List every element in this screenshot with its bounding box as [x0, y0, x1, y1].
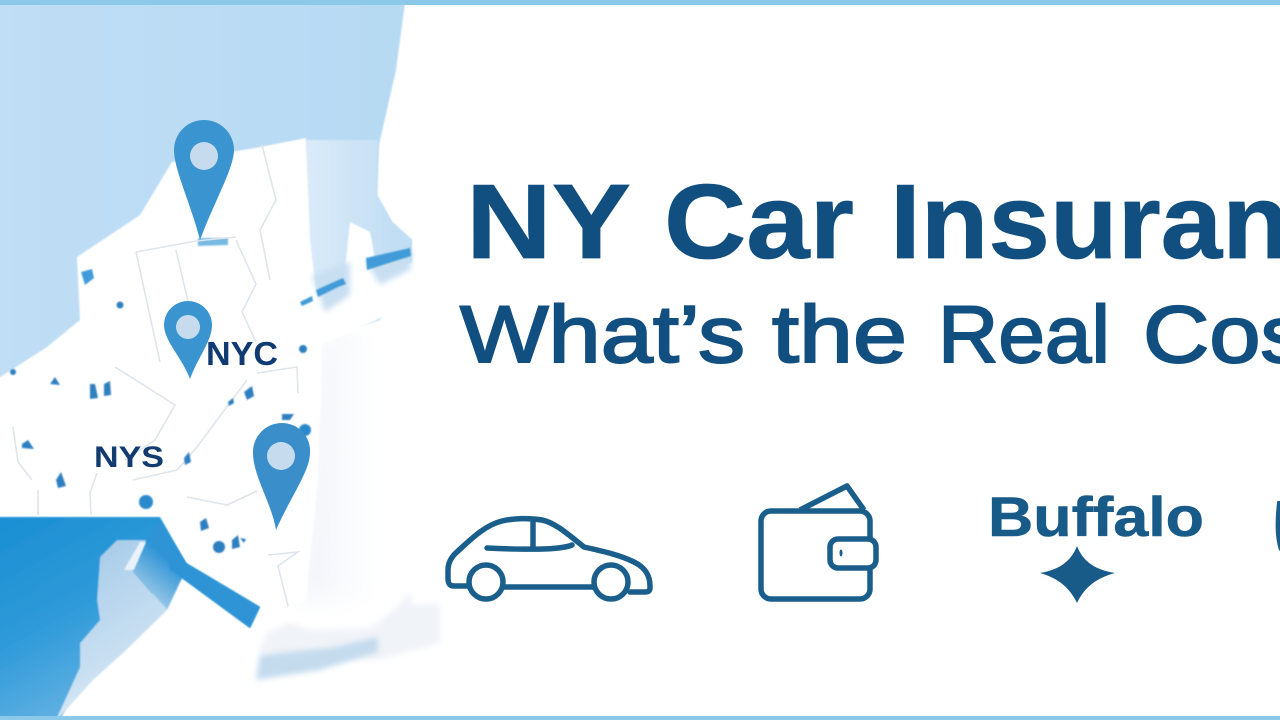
peninsula pale water	[55, 540, 167, 720]
heading: line two: Real	[938, 290, 1110, 380]
icon: wallet	[761, 486, 876, 599]
icon: four-point star	[1040, 546, 1115, 603]
heading: line two: the	[772, 290, 907, 380]
heading: line two	[460, 290, 1280, 380]
icon: top map pin	[174, 120, 234, 240]
top border	[0, 0, 1280, 5]
bay water	[0, 517, 260, 720]
county lines	[13, 145, 298, 606]
sound blue gradient	[133, 520, 186, 610]
heading: line two: What’s	[460, 290, 745, 380]
icon: lower map pin	[253, 423, 310, 530]
map: water and land	[0, 0, 440, 720]
pale shadow at right tip	[366, 250, 412, 285]
inland channel	[306, 140, 412, 320]
bottom border	[0, 716, 1280, 720]
long island strait	[160, 522, 260, 628]
pale shadow beside island tip	[312, 262, 350, 312]
label: NYC: NYC	[206, 335, 278, 372]
heading: line one: NY	[466, 163, 631, 281]
label: Buffalo: Buffalo	[988, 485, 1204, 548]
icon: middle map pin	[164, 301, 212, 379]
long island shadow	[256, 637, 378, 680]
long island	[260, 592, 440, 660]
icon: clipped shield	[1278, 503, 1280, 550]
small blue map details	[10, 302, 307, 553]
white highlight on peninsula	[124, 542, 146, 570]
icon: car	[448, 519, 650, 599]
heading: line one: Car	[664, 163, 854, 281]
north water area	[0, 0, 412, 420]
lower right shaded land	[300, 330, 372, 600]
title	[460, 163, 1280, 380]
coastal blue marks	[81, 238, 411, 509]
land mass	[0, 138, 420, 612]
heading: line one	[466, 163, 1280, 281]
label: NYS: NYS	[94, 441, 164, 474]
